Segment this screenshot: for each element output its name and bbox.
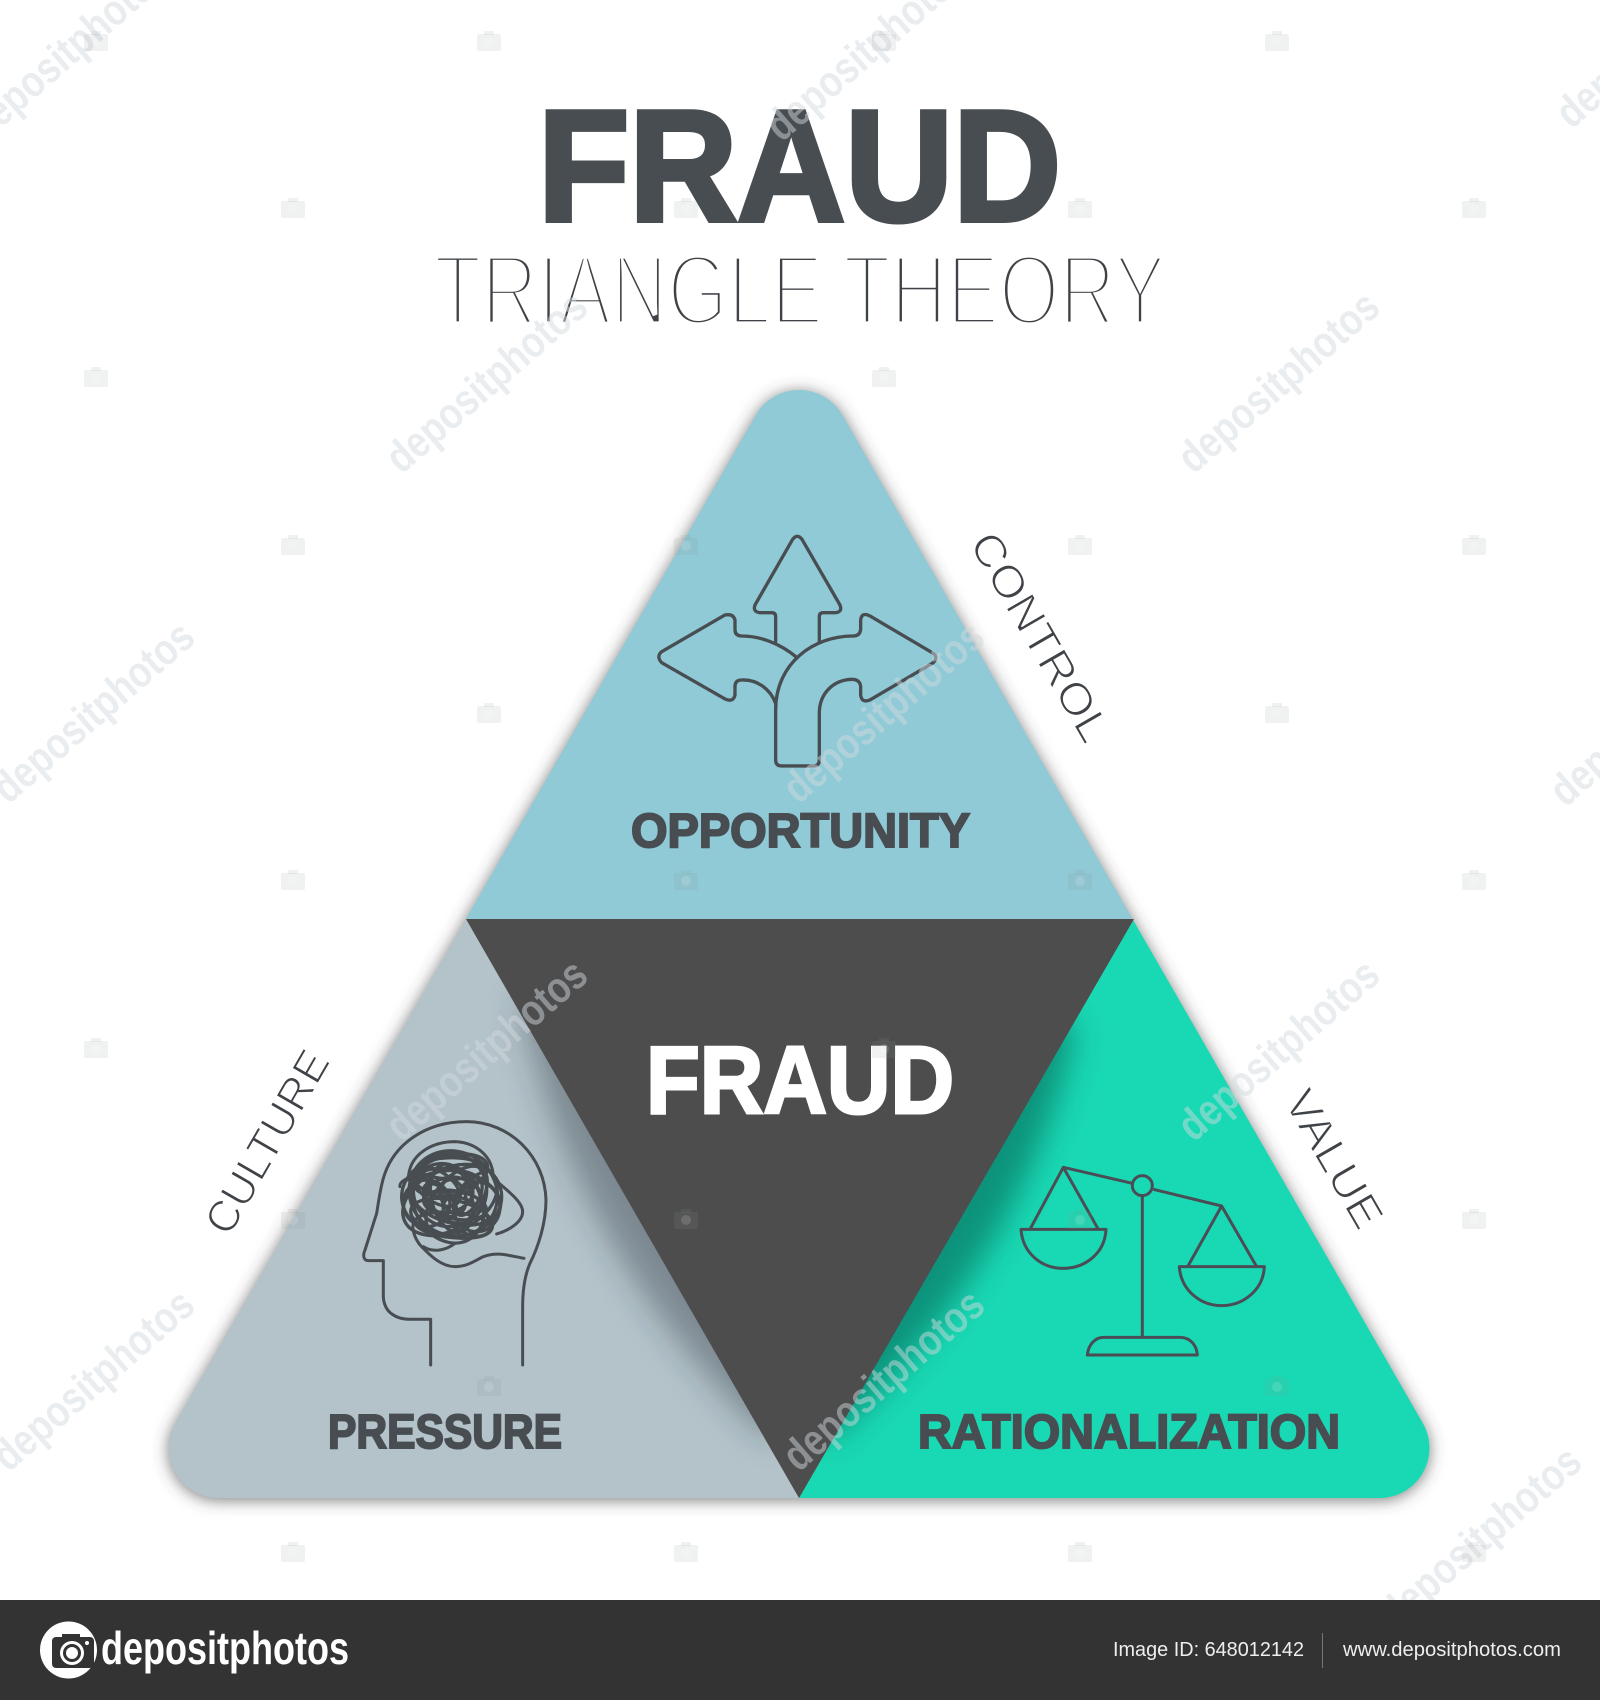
panel: pressure (132, 919, 799, 1498)
shadow of centre triangle (520, 1000, 1075, 1440)
drop shadow (169, 392, 1429, 1500)
triangle diagram (132, 340, 1466, 1500)
icon: camera logo (40, 1622, 97, 1678)
label: PRESSURE: PRESSURE (328, 1406, 562, 1459)
website: www.depositphotos.com (1342, 1639, 1561, 1661)
watermarks: depositphotos (376, 950, 597, 1151)
icon: three-way arrows (659, 536, 936, 766)
watermarks: depositphotos (773, 612, 994, 813)
subtitle: Triangle Theory: TRIANGLE THEORY (434, 234, 1166, 346)
image id: Image ID: 648012142 (1113, 1639, 1304, 1661)
panel: opportunity (466, 340, 1134, 919)
label: CONTROL: CONTROL (960, 524, 1119, 751)
footer bar (0, 1600, 1600, 1700)
label: CULTURE: CULTURE (195, 1042, 340, 1243)
label: VALUE: VALUE (1274, 1081, 1393, 1237)
title: FRAUD: FRAUD (538, 78, 1061, 254)
icon: head with tangled thoughts (364, 1122, 546, 1365)
watermarks: depositphotos (773, 1280, 994, 1481)
label: OPPORTUNITY: OPPORTUNITY (631, 805, 970, 858)
panel: rationalization (799, 919, 1466, 1498)
panel: fraud centre (466, 919, 1134, 1498)
label: RATIONALIZATION: RATIONALIZATION (918, 1406, 1340, 1459)
watermarks: depositphotos (1168, 282, 1389, 483)
label: FRAUD centre: FRAUD (646, 1027, 954, 1134)
icon: balance scale (1021, 1167, 1264, 1355)
watermarks: depositphotos (1168, 950, 1389, 1151)
watermarks: depositphotos (376, 282, 597, 483)
logo text: depositphotos (101, 1622, 349, 1674)
